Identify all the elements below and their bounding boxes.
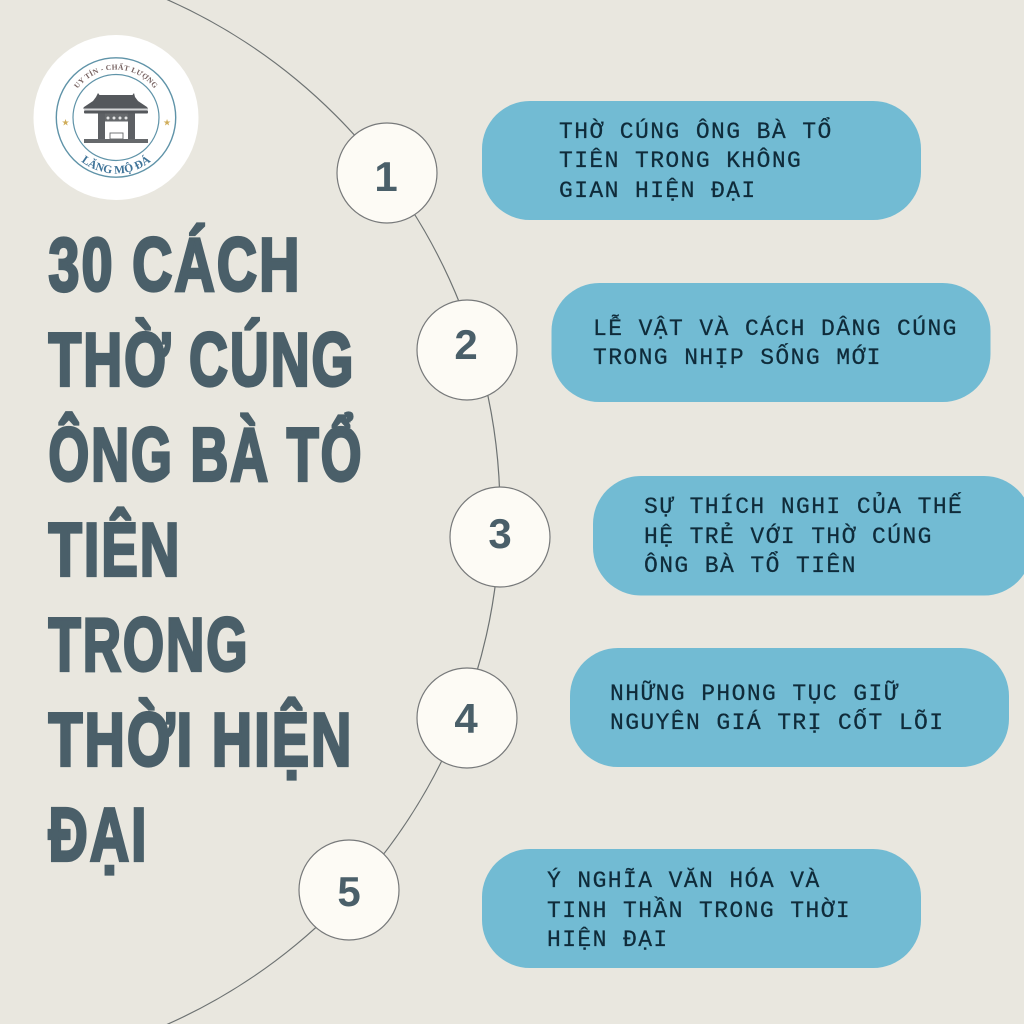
step 2 card: TRONG NHỊP SỐNG MỚI bbox=[593, 342, 882, 371]
step 5 node bbox=[299, 840, 399, 940]
step 3 card bbox=[593, 476, 1024, 596]
title: ÔNG BÀ TỔ bbox=[48, 412, 364, 496]
step 3 card: SỰ THÍCH NGHI CỦA THẾ bbox=[644, 490, 963, 520]
logo bottom text: LĂNG MỘ ĐÁ bbox=[81, 154, 151, 174]
step 5 card: HIỆN ĐẠI bbox=[547, 926, 669, 953]
logo badge bbox=[34, 35, 198, 200]
step 3 card: ÔNG BÀ TỔ TIÊN bbox=[644, 550, 857, 579]
step 5 card bbox=[482, 849, 921, 968]
title: 30 CÁCH bbox=[48, 222, 302, 306]
connecting arc bbox=[0, 0, 500, 1024]
step 4 node: 4 bbox=[454, 695, 478, 742]
step 4 card: NGUYÊN GIÁ TRỊ CỐT LÕI bbox=[610, 707, 944, 736]
step 4 card bbox=[570, 648, 1009, 767]
logo stars: ★ bbox=[61, 118, 70, 128]
step 2 node: 2 bbox=[454, 321, 478, 368]
step 3 card: HỆ TRẺ VỚI THỜ CÚNG bbox=[644, 520, 933, 550]
step 1 card: THỜ CÚNG ÔNG BÀ TỔ bbox=[559, 116, 833, 145]
step 2 card: LỄ VẬT VÀ CÁCH DÂNG CÚNG bbox=[593, 313, 958, 342]
step 1 node bbox=[337, 123, 437, 223]
title: TRONG bbox=[48, 602, 250, 686]
step 1 card: TIÊN TRONG KHÔNG bbox=[559, 146, 802, 174]
step 4 card: NHỮNG PHONG TỤC GIỮ bbox=[610, 680, 899, 707]
step 1 node: 1 bbox=[374, 153, 398, 200]
step 4 node bbox=[417, 668, 517, 768]
step 2 node bbox=[417, 300, 517, 400]
step 1 card bbox=[482, 101, 921, 220]
logo temple gate bbox=[83, 93, 148, 143]
step 5 card: TINH THẦN TRONG THỜI bbox=[547, 895, 851, 924]
step 5 node: 5 bbox=[337, 868, 361, 915]
logo stars: ★ bbox=[163, 118, 171, 128]
title: ĐẠI bbox=[48, 792, 148, 876]
title: THỜ CÚNG bbox=[48, 318, 356, 402]
title: TIÊN bbox=[48, 508, 182, 592]
title bbox=[48, 222, 364, 876]
step 2 card bbox=[552, 283, 990, 402]
logo top text: UY TÍN - CHẤT LƯỢNG bbox=[74, 63, 158, 88]
title: THỜI HIỆN bbox=[48, 698, 354, 782]
step 5 card: Ý NGHĨA VĂN HÓA VÀ bbox=[547, 866, 821, 894]
step 3 node: 3 bbox=[488, 510, 512, 557]
step 1 card: GIAN HIỆN ĐẠI bbox=[559, 177, 757, 204]
step 3 node bbox=[450, 487, 550, 587]
